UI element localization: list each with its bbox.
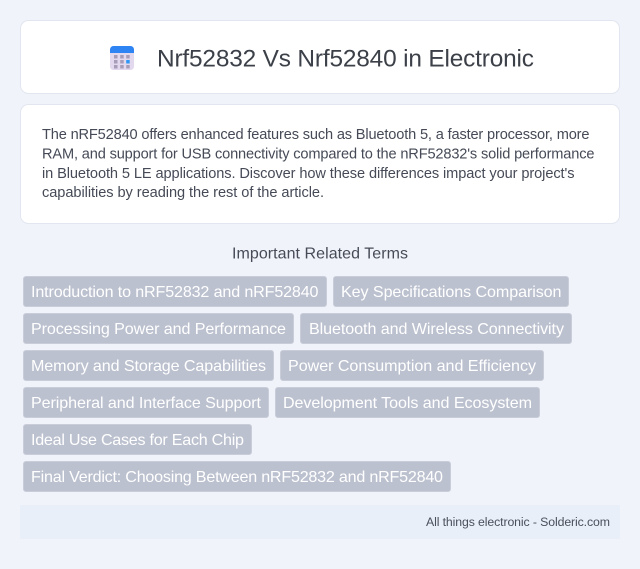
chip: use cases: Ideal Use Cases for Each Chip bbox=[31, 431, 244, 449]
chip: final verdict bbox=[24, 462, 450, 492]
chip: processing power: Processing Power and Performance bbox=[31, 320, 286, 338]
chip: key specifications: Key Specifications Comparison bbox=[341, 283, 562, 301]
text block: intro: The nRF52840 offers enhanced features such as Bluetooth 5, a faster processor, more bbox=[42, 127, 590, 143]
chip: introduction bbox=[24, 276, 326, 306]
chip: peripheral bbox=[24, 388, 268, 418]
chip: bluetooth: Bluetooth and Wireless Connectivity bbox=[309, 320, 565, 338]
chip: processing power bbox=[24, 314, 294, 344]
title: Nrf52832 Vs Nrf52840 in Electronic bbox=[157, 46, 534, 72]
chip: memory bbox=[24, 350, 274, 380]
chip: introduction: Introduction to nRF52832 and nRF52840 bbox=[31, 283, 319, 301]
chip: bluetooth bbox=[300, 314, 572, 344]
heading: related terms: Important Related Terms bbox=[232, 246, 408, 262]
text block: intro bbox=[42, 127, 594, 201]
chip: development tools: Development Tools and Ecosystem bbox=[283, 394, 532, 412]
panel: intro paragraph bbox=[20, 104, 620, 224]
chip: development tools bbox=[276, 388, 540, 418]
icon: calendar bbox=[110, 46, 134, 70]
chip: use cases bbox=[24, 424, 252, 454]
chip: power consumption: Power Consumption and Efficiency bbox=[288, 357, 537, 375]
text block: intro: in Bluetooth 5 LE applications. Discover how these differences impact your project's bbox=[42, 166, 574, 182]
chip: key specifications bbox=[334, 276, 568, 306]
chip: memory: Memory and Storage Capabilities bbox=[31, 357, 266, 375]
footer text: All things electronic - Solderic.com bbox=[426, 515, 610, 529]
text block: intro: RAM, and support for USB connectivity compared to the nRF52832's solid performance bbox=[42, 146, 594, 162]
text block: intro: capabilities by reading the rest of the article. bbox=[42, 185, 324, 201]
chip: peripheral: Peripheral and Interface Support bbox=[31, 394, 262, 412]
chip: final verdict: Final Verdict: Choosing Between nRF52832 and nRF52840 bbox=[31, 468, 443, 486]
panel: title card bbox=[20, 20, 620, 94]
chip: power consumption bbox=[280, 350, 544, 380]
footer bar bbox=[20, 505, 620, 539]
